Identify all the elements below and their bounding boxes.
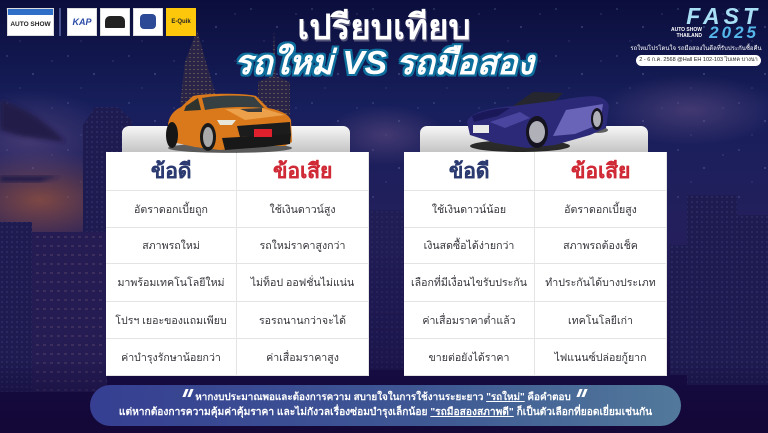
panel: used car table: อัตราดอกเบี้ยสูง [564,204,637,216]
panel: used car table: ขายต่อยังได้ราคา [429,352,509,364]
panel: new car table: รอรถนานกว่าจะได้ [259,314,346,326]
panel: used car table [404,152,667,376]
title line 1: เปรียบเทียบ [297,8,471,47]
panel: used car table: สภาพรถต้องเช็ค [563,240,638,252]
callout: conclusion [90,385,681,426]
panel: new car table: มาพร้อมเทคโนโลยีใหม่ [117,277,225,289]
heading: pros: ข้อดี [151,160,191,182]
panel: new car table: สภาพรถใหม่ [142,240,200,252]
heading: cons: ข้อเสีย [571,160,630,182]
quote text line 2: แต่หากต้องการความคุ้มค่าคุ้มราคา และไม่กังวลเรื่องซ่อมบำรุงเล็กน้อย "รถมือสองสภาพดี" ก็เป็นตัวเลือกที่ยอดเยี่ยมเช่นกัน [119,407,652,418]
panel: new car table: อัตราดอกเบี้ยถูก [134,204,208,216]
Auto Show Thailand [671,27,702,39]
panel: used car table: เลือกที่มีเงื่อนไขรับประกัน [411,277,527,289]
panel: used car table: เทคโนโลยีเก่า [568,314,633,326]
date pill [636,55,761,66]
logo: Auto Show [7,8,54,36]
logo: lion [133,8,163,36]
2025 wordmark: 2025 [709,23,759,42]
panel: new car table: ไม่ท็อป ออฟชั่นไม่แน่น [251,277,354,289]
quote text line 1: หากงบประมาณพอและต้องการความ สบายใจในการใช้งานระยะยาว "รถใหม่" คือคำตอบ [195,392,571,403]
panel: new car table: รถใหม่ราคาสูงกว่า [260,240,345,252]
icon: orange car [166,94,292,153]
logo: buffalo [100,8,130,36]
icon: open quote [182,389,194,397]
panel tab: used car [420,126,648,156]
heading: pros: ข้อดี [449,160,489,182]
panel: new car table: ค่าเสื่อมราคาสูง [266,352,339,364]
heading: pros [404,152,535,191]
icon: close quote [576,389,588,397]
tagline: รถใหม่โปรโดนใจ รถมือสองในดีลที่รับประกันซื้อคืน [630,46,762,52]
logo: Auto Show: AUTO SHOW [10,21,51,28]
divider: logo separator [59,8,61,36]
logo: KAP [67,8,97,36]
panel: new car table: โปรฯ เยอะของแถมเพียบ [115,314,227,326]
panel: used car table: เงินสดซื้อได้ง่ายกว่า [424,240,514,252]
icon: purple convertible car [467,92,609,152]
heading: pros [106,152,237,191]
panel: used car table: ค่าเสื่อมราคาต่ำแล้ว [422,314,516,326]
panel tab: new car [122,126,350,156]
panel: used car table: ทำประกันได้บางประเภท [545,277,656,289]
heading: cons [237,152,369,191]
panel: new car table: ค่าบำรุงรักษาน้อยกว่า [121,352,221,364]
title [234,8,538,82]
logo: E-Quik: E-Quik [171,19,191,25]
panel: new car table: ใช้เงินดาวน์สูง [269,204,336,216]
panel: used car table: ไฟแนนซ์ปล่อยกู้ยาก [554,352,647,364]
logo: KAP: KAP [72,17,92,27]
heading: cons: ข้อเสีย [273,160,332,182]
Auto Show Thailand: THAILAND [676,33,702,39]
panel: used car table: ใช้เงินดาวน์น้อย [432,204,506,216]
date pill: 2 - 6 ก.ค. 2568 @Hall EH 102-103 ไบเทค บางนา [639,57,758,63]
event logo: FAST 2025 [630,3,762,66]
panel: new car table [106,152,369,376]
logo: E-Quik [166,8,196,36]
Auto Show Thailand: AUTO SHOW [671,27,702,33]
heading: cons [535,152,667,191]
title line 2: รถใหม่ VS รถมือสอง [234,45,534,82]
FAST wordmark: FAST [686,3,761,29]
